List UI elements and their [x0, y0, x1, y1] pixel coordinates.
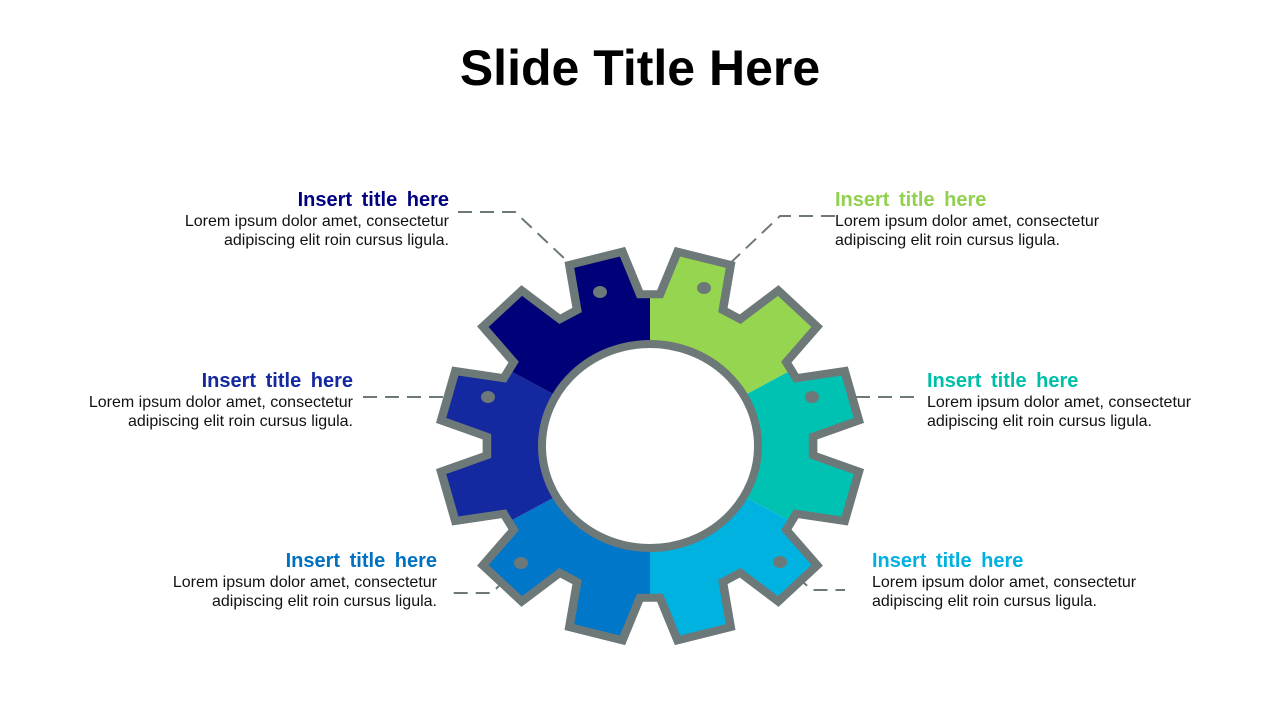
text: right: adipiscing elit roin cursus ligula.: [927, 413, 1152, 430]
text: top left: Lorem ipsum dolor amet, consectetur: [185, 213, 449, 230]
text: bottom right: Insert title here: [872, 550, 1023, 572]
text: bottom left: Lorem ipsum dolor amet, consectetur: [173, 574, 437, 591]
title: Slide Title Here: [460, 40, 820, 96]
text: bottom left: [173, 550, 437, 610]
text: left: Insert title here: [202, 370, 353, 392]
text: right: [927, 370, 1191, 430]
text: left: [89, 370, 353, 430]
text: bottom right: Lorem ipsum dolor amet, consectetur: [872, 574, 1136, 591]
dots: [481, 282, 819, 569]
gear diagram: [363, 211, 914, 646]
text: top right: Insert title here: [835, 189, 986, 211]
text: top left: Insert title here: [298, 189, 449, 211]
text: top left: [185, 189, 449, 249]
text: top left: adipiscing elit roin cursus ligula.: [224, 232, 449, 249]
text: bottom right: [872, 550, 1136, 610]
text: bottom left: adipiscing elit roin cursus ligula.: [212, 593, 437, 610]
text: bottom left: Insert title here: [286, 550, 437, 572]
text: left: adipiscing elit roin cursus ligula.: [128, 413, 353, 430]
text: right: Insert title here: [927, 370, 1078, 392]
leader lines: [363, 212, 916, 593]
text: top right: adipiscing elit roin cursus ligula.: [835, 232, 1060, 249]
inner hole: [542, 344, 758, 548]
text: top right: [835, 189, 1099, 249]
gear: [436, 246, 864, 646]
text: right: Lorem ipsum dolor amet, consectetur: [927, 394, 1191, 411]
text: top right: Lorem ipsum dolor amet, consectetur: [835, 213, 1099, 230]
text: left: Lorem ipsum dolor amet, consectetur: [89, 394, 353, 411]
text: bottom right: adipiscing elit roin cursus ligula.: [872, 593, 1097, 610]
